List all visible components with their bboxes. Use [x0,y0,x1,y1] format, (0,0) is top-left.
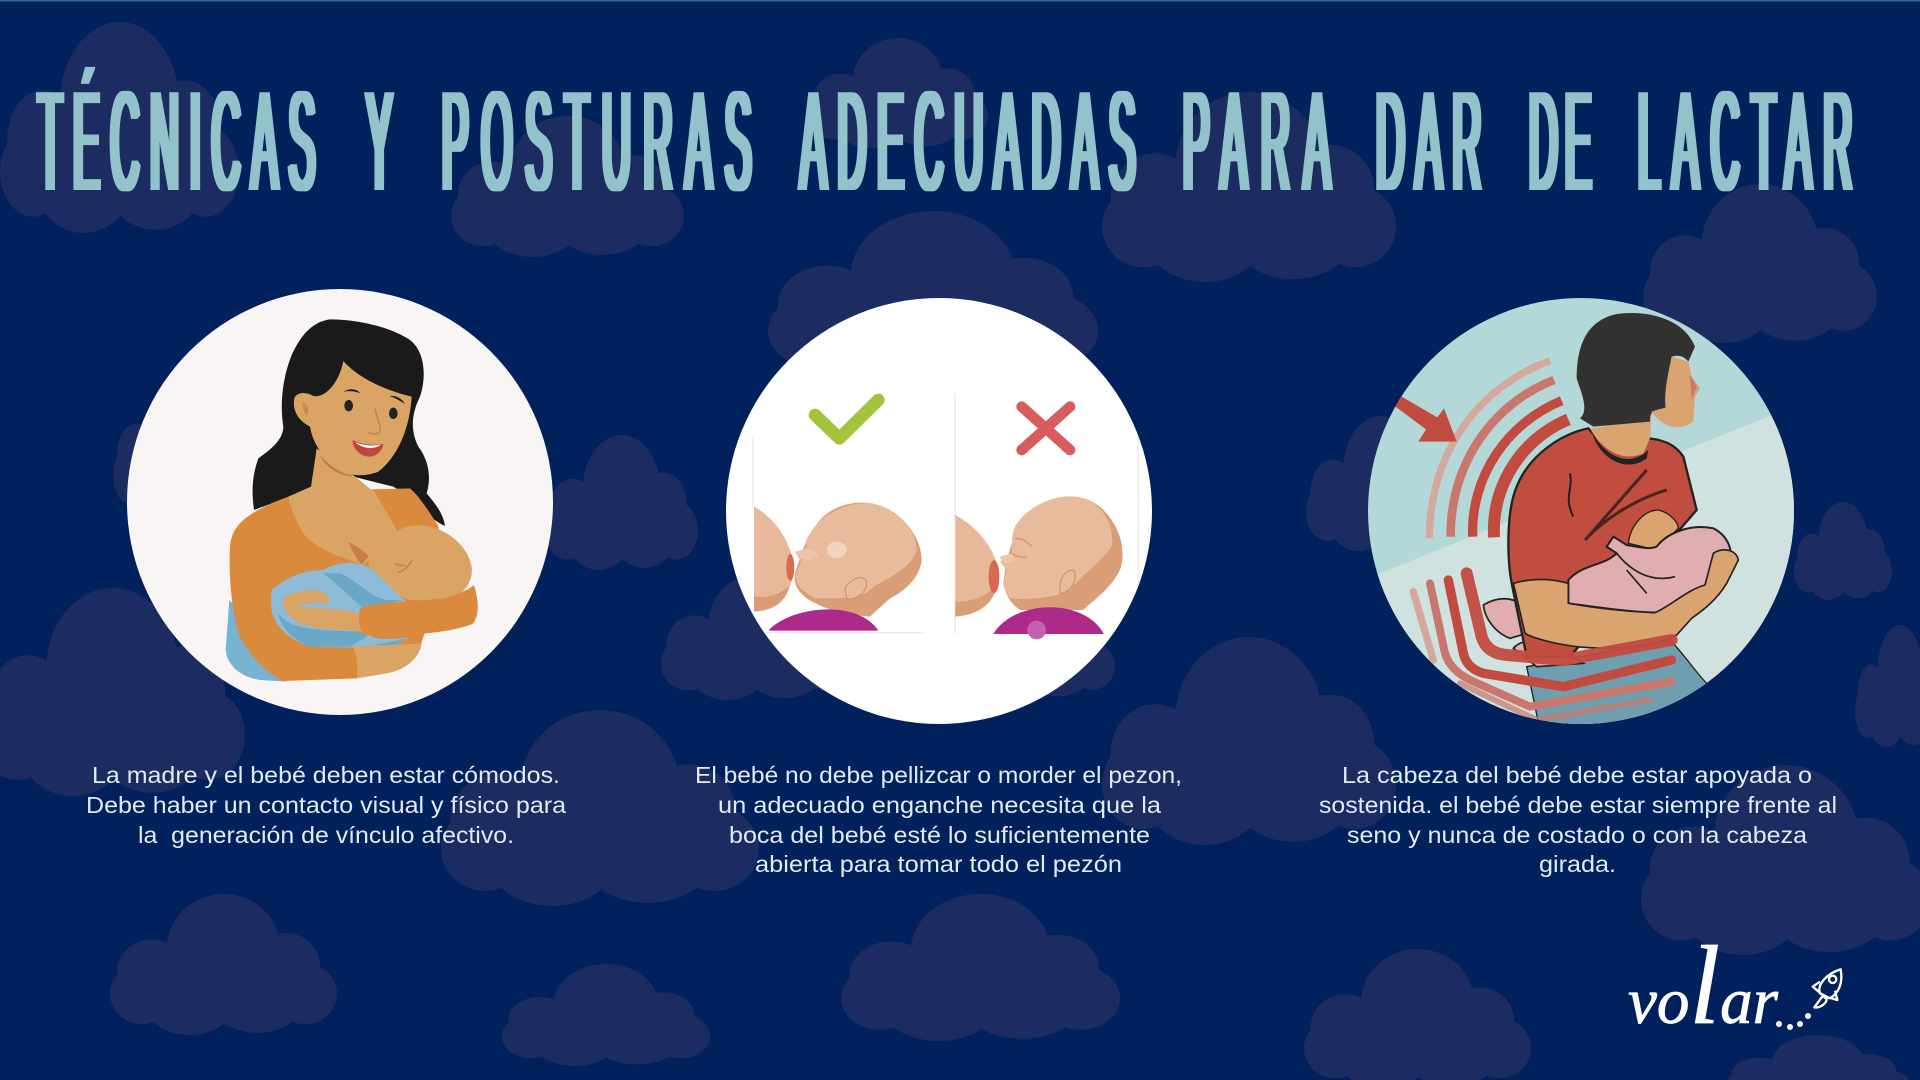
baby body [1568,527,1731,613]
correct latch: baby and breast [754,503,922,631]
text block: comfort [86,762,567,848]
icon: cross mark [1022,407,1070,450]
title [38,63,1852,221]
icon: check mark [815,400,878,438]
wall and floor background [1363,405,1797,730]
panel: comfortable mother illustration [127,289,553,715]
text block: comfort: Debe haber un contacto visual y físico para [86,792,567,818]
baby legs behind mother [1483,599,1583,667]
text block: head support [1319,762,1837,877]
jeans [1527,640,1707,730]
text block: head support: girada. [1539,851,1616,877]
text block: latch: abierta para tomar todo el pezón [755,851,1122,877]
text block: latch: El bebé no debe pellizcar o morder el pezon, [695,762,1182,788]
panel: head support illustration [1363,298,1797,730]
mother: face [1652,357,1700,427]
icon: mother with baby [226,319,478,682]
text block: head support: La cabeza del bebé debe estar apoyada o [1342,762,1812,788]
title: LACTAR [1638,63,1852,221]
text block: latch: un adecuado enganche necesita que la [718,792,1162,818]
incorrect latch: baby and breast [955,496,1123,639]
title: Y [366,63,393,221]
mother: forearm and hand [1513,550,1738,648]
text block: head support: sostenida. el bebé debe estar siempre frente al [1319,792,1837,818]
upper motion arcs [1429,361,1568,538]
panel: latch comparison illustration [726,298,1152,724]
icon: red arrow [1393,397,1457,442]
title: DE [1529,63,1591,221]
mother: shirt [1508,428,1697,657]
mother: neck [1590,413,1652,456]
lower motion arcs [1413,573,1672,720]
title: ADECUADAS [800,63,1135,221]
title: PARA [1183,63,1330,221]
text block: latch [695,762,1182,877]
title: TÉCNICAS [38,63,315,221]
mother: hair [1577,313,1695,427]
panel frame lines [753,393,1138,633]
icon: rocket [1813,969,1841,1007]
title: POSTURAS [442,63,751,221]
text block: comfort: la generación de vínculo afectivo. [138,822,514,848]
title: DAR [1376,63,1481,221]
text block: comfort: La madre y el bebé deben estar cómodos. [92,762,560,788]
mother: breast and shirt folds [1628,510,1678,550]
text block: latch: boca del bebé esté lo suficientemente [729,822,1150,848]
text block: head support: seno y nunca de costado o con la cabeza [1347,822,1808,848]
logo: volar: volar [1628,924,1778,1048]
